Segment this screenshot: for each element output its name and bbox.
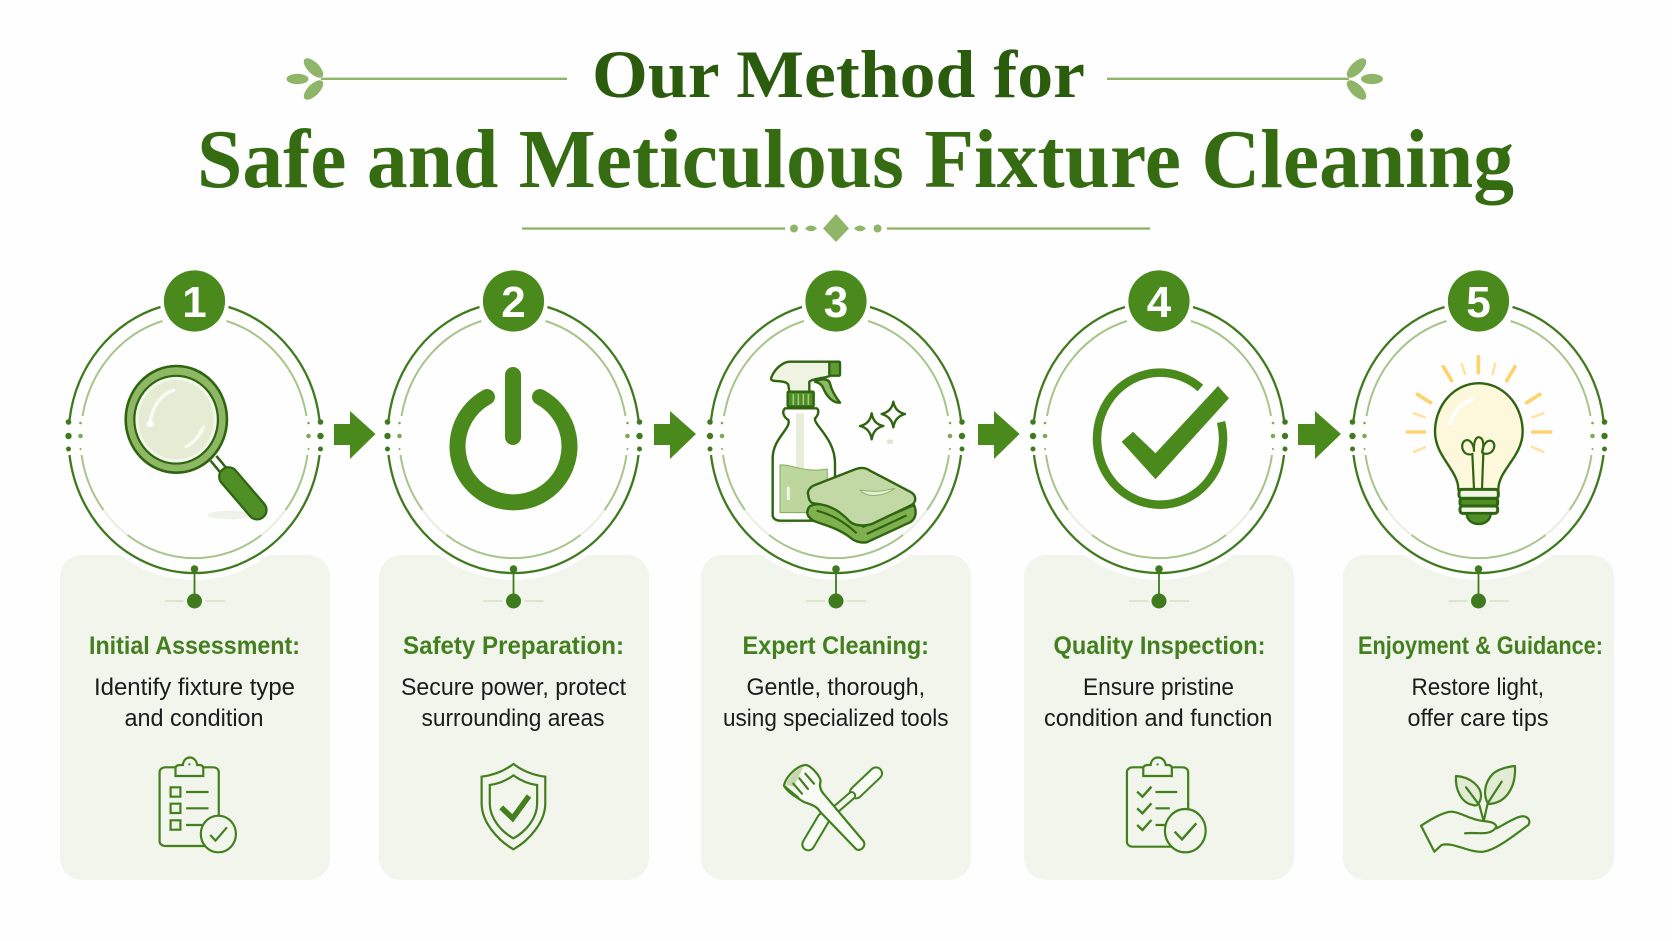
step 4 ring and number: 4 — [1147, 278, 1172, 327]
title ornament: left leaf line — [286, 55, 567, 103]
icon: clipboard checklist — [160, 757, 236, 852]
text: step 1: Initial Assessment: — [89, 632, 300, 660]
panel: step 3 card — [701, 555, 971, 880]
title ornament: right leaf line — [1107, 55, 1383, 103]
icon: clipboard with check — [1127, 757, 1206, 852]
step 1 ring and number — [62, 270, 326, 608]
step 4 ring and number — [1027, 270, 1291, 608]
step 5 ring and number: 5 — [1466, 278, 1491, 327]
panel: step 4 card — [1024, 555, 1294, 880]
panel: step 1 card — [60, 555, 330, 880]
panel: step 2 card — [379, 555, 649, 880]
icon: check mark in circle — [1097, 373, 1229, 505]
step 3 ring and number: 3 — [824, 278, 848, 327]
text: step 5: Enjoyment & Guidance: — [1358, 632, 1603, 660]
title — [197, 36, 1514, 206]
text: step 2: Secure power, protect — [401, 674, 626, 701]
arrow: step 2 to 3 — [654, 411, 696, 459]
text: step 2: surrounding areas — [422, 705, 604, 732]
text: step 5: offer care tips — [1408, 705, 1548, 732]
step 2 ring and number: 2 — [501, 278, 526, 327]
arrow: step 4 to 5 — [1298, 411, 1341, 459]
text: step 1 — [89, 632, 300, 732]
step 1 ring and number: 1 — [182, 278, 207, 327]
text: step 4: Quality Inspection: — [1054, 632, 1266, 660]
step 3 ring and number — [704, 270, 968, 608]
icon: hand holding sprout — [1421, 766, 1529, 852]
text: step 1: and condition — [124, 705, 264, 732]
icon: magnifying glass — [126, 366, 257, 519]
text: step 4: Ensure pristine — [1083, 674, 1234, 701]
title divider — [522, 214, 1150, 242]
text: step 3: using specialized tools — [723, 705, 948, 732]
text: step 3: Gentle, thorough, — [746, 674, 925, 701]
text: step 5: Restore light, — [1412, 674, 1544, 701]
icon: spray bottle and cloths — [771, 362, 916, 543]
text: step 2: Safety Preparation: — [403, 632, 624, 660]
text: step 3: Expert Cleaning: — [742, 632, 929, 660]
text: step 4 — [1044, 632, 1272, 732]
panel: step 5 card — [1343, 555, 1614, 880]
icon: crossed brush and tool — [784, 765, 876, 850]
title: Our Method for — [592, 36, 1085, 112]
icon: safety shield — [482, 764, 545, 849]
title: Safe and Meticulous Fixture Cleaning — [197, 113, 1514, 206]
text: step 3 — [723, 632, 948, 732]
text: step 2 — [401, 632, 626, 732]
icon: light bulb — [1407, 357, 1551, 524]
arrow: step 3 to 4 — [978, 411, 1020, 459]
arrow: step 1 to 2 — [334, 411, 376, 459]
text: step 4: condition and function — [1044, 705, 1272, 732]
text: step 1: Identify fixture type — [94, 674, 295, 701]
step 2 ring and number — [382, 270, 646, 608]
text: step 5 — [1358, 632, 1603, 732]
step 5 ring and number — [1346, 270, 1610, 608]
icon: power symbol — [458, 375, 570, 502]
